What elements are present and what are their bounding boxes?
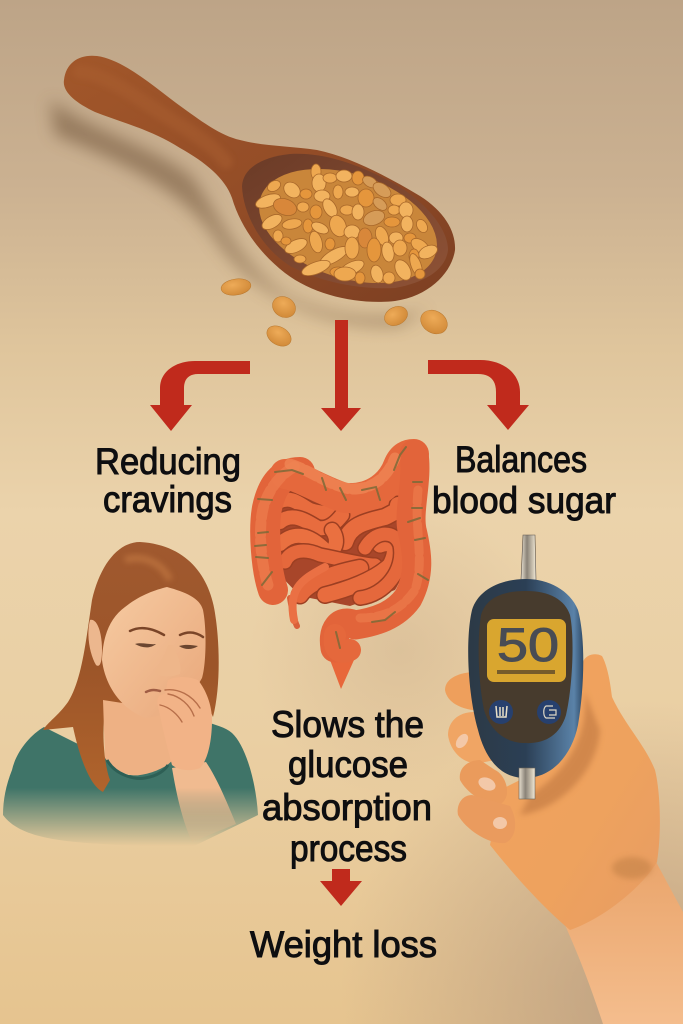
icon: woman with craving (3, 542, 258, 848)
spoon bowl hollow (242, 154, 448, 288)
finger 2 (448, 712, 495, 763)
meter reading: 50 (497, 618, 559, 671)
label: balances blood sugar: Balances (455, 439, 587, 480)
meter body (468, 579, 583, 778)
woman's shirt (3, 722, 258, 848)
intestine veins (255, 447, 428, 648)
label: reducing cravings: Reducing (95, 441, 241, 482)
woman's hand (157, 677, 212, 770)
label: balances blood sugar (432, 439, 616, 521)
label: slows the glucose absorption process: absorption (262, 787, 432, 828)
seed pile (244, 148, 452, 304)
handle highlight (80, 72, 226, 162)
label: reducing cravings (95, 441, 241, 520)
woman's nose and mouth (146, 645, 181, 692)
rectum tip (327, 652, 354, 689)
finger 4 (458, 795, 515, 843)
arrow: to weight loss (320, 869, 362, 906)
meter face (479, 591, 573, 743)
woman's forearm (172, 762, 236, 842)
arrow: right (428, 360, 529, 430)
label: balances blood sugar: blood sugar (432, 480, 616, 521)
loose seeds (220, 277, 452, 350)
spoon with seeds (50, 56, 455, 326)
finger 1 (445, 672, 482, 711)
fingernails (453, 732, 507, 829)
label: slows the glucose absorption process: Slows the (271, 704, 424, 745)
large intestine (261, 454, 419, 652)
forearm (565, 860, 683, 1024)
wrist shadow (612, 857, 652, 879)
meter screen (487, 619, 566, 682)
spoon shadow (50, 100, 430, 326)
label: slows the glucose absorption process: glucose (288, 744, 408, 785)
icon: intestines (255, 447, 428, 689)
woman's face (102, 587, 206, 718)
label: slows the glucose absorption process (262, 704, 432, 869)
arrow: left (150, 361, 250, 431)
appendix (290, 598, 297, 626)
spoon body (64, 56, 455, 302)
shirt collar (107, 760, 168, 778)
glucose meter (468, 535, 583, 799)
palm (490, 654, 660, 930)
meter buttons (489, 700, 561, 724)
small intestine coils (278, 492, 401, 620)
woman's neck (103, 700, 172, 775)
meter shadow on palm (520, 690, 600, 815)
label: weight loss: Weight loss (250, 924, 437, 965)
arrow: centre (321, 320, 361, 431)
small intestine backing (275, 485, 406, 606)
bottom test strip (519, 768, 535, 799)
woman's hair (43, 542, 219, 792)
hair shine (125, 558, 170, 580)
top test strip (521, 535, 536, 580)
icon: hand holding glucose meter (445, 535, 683, 1024)
woman's finger lines (160, 690, 200, 722)
meter small print (497, 670, 555, 674)
label: slows the glucose absorption process: process (290, 828, 407, 869)
label: reducing cravings: cravings (103, 479, 232, 520)
woman's eyes and brows (130, 628, 203, 649)
woman's ear (88, 620, 102, 666)
finger 3 (460, 760, 507, 804)
